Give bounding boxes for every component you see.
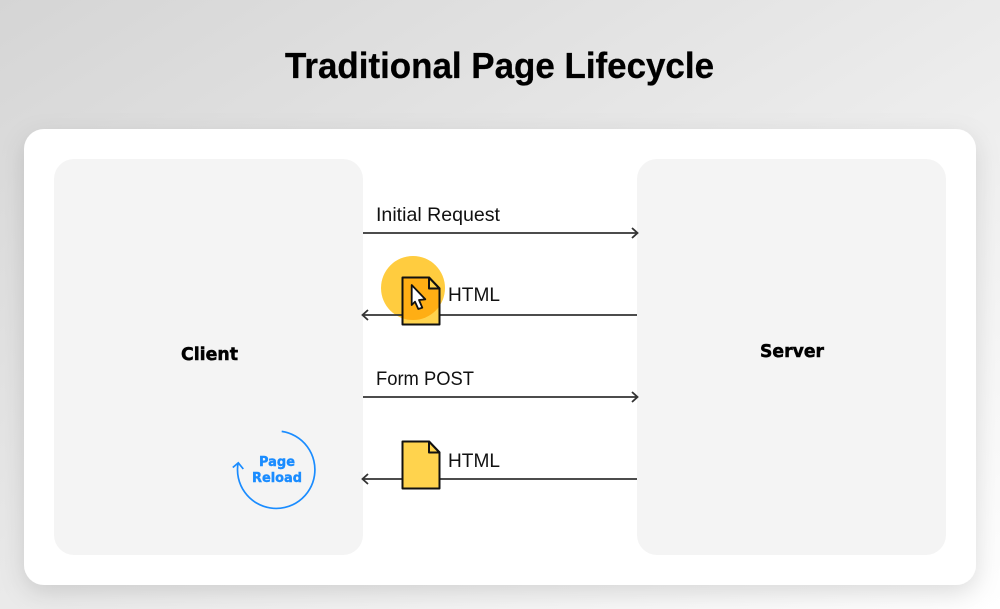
label: html response: HTML xyxy=(448,284,500,306)
arrow: form post xyxy=(363,392,638,402)
client label: Client xyxy=(181,344,238,365)
page reload indicator xyxy=(233,431,315,508)
icon: reload arc xyxy=(233,431,315,508)
label: page reload: Reload xyxy=(252,471,302,486)
label: initial request: Initial Request xyxy=(376,204,501,226)
panel: client xyxy=(54,159,363,555)
panel: main card xyxy=(24,129,976,585)
title: Traditional Page Lifecycle xyxy=(285,45,714,86)
panel: server xyxy=(637,159,946,555)
arrow: html response xyxy=(362,310,637,320)
arrow: initial request xyxy=(363,228,638,238)
icon: html document with cursor xyxy=(402,276,440,326)
icon: highlight circle xyxy=(381,256,445,320)
label: form post: Form POST xyxy=(376,368,474,390)
icon: cursor xyxy=(412,285,425,309)
label: page reload: Page xyxy=(259,455,295,470)
icon: html document xyxy=(402,442,440,488)
label: second html response: HTML xyxy=(448,450,500,472)
server label: Server xyxy=(760,341,824,362)
label: page reload xyxy=(252,455,302,486)
arrow: second html response xyxy=(362,474,637,484)
